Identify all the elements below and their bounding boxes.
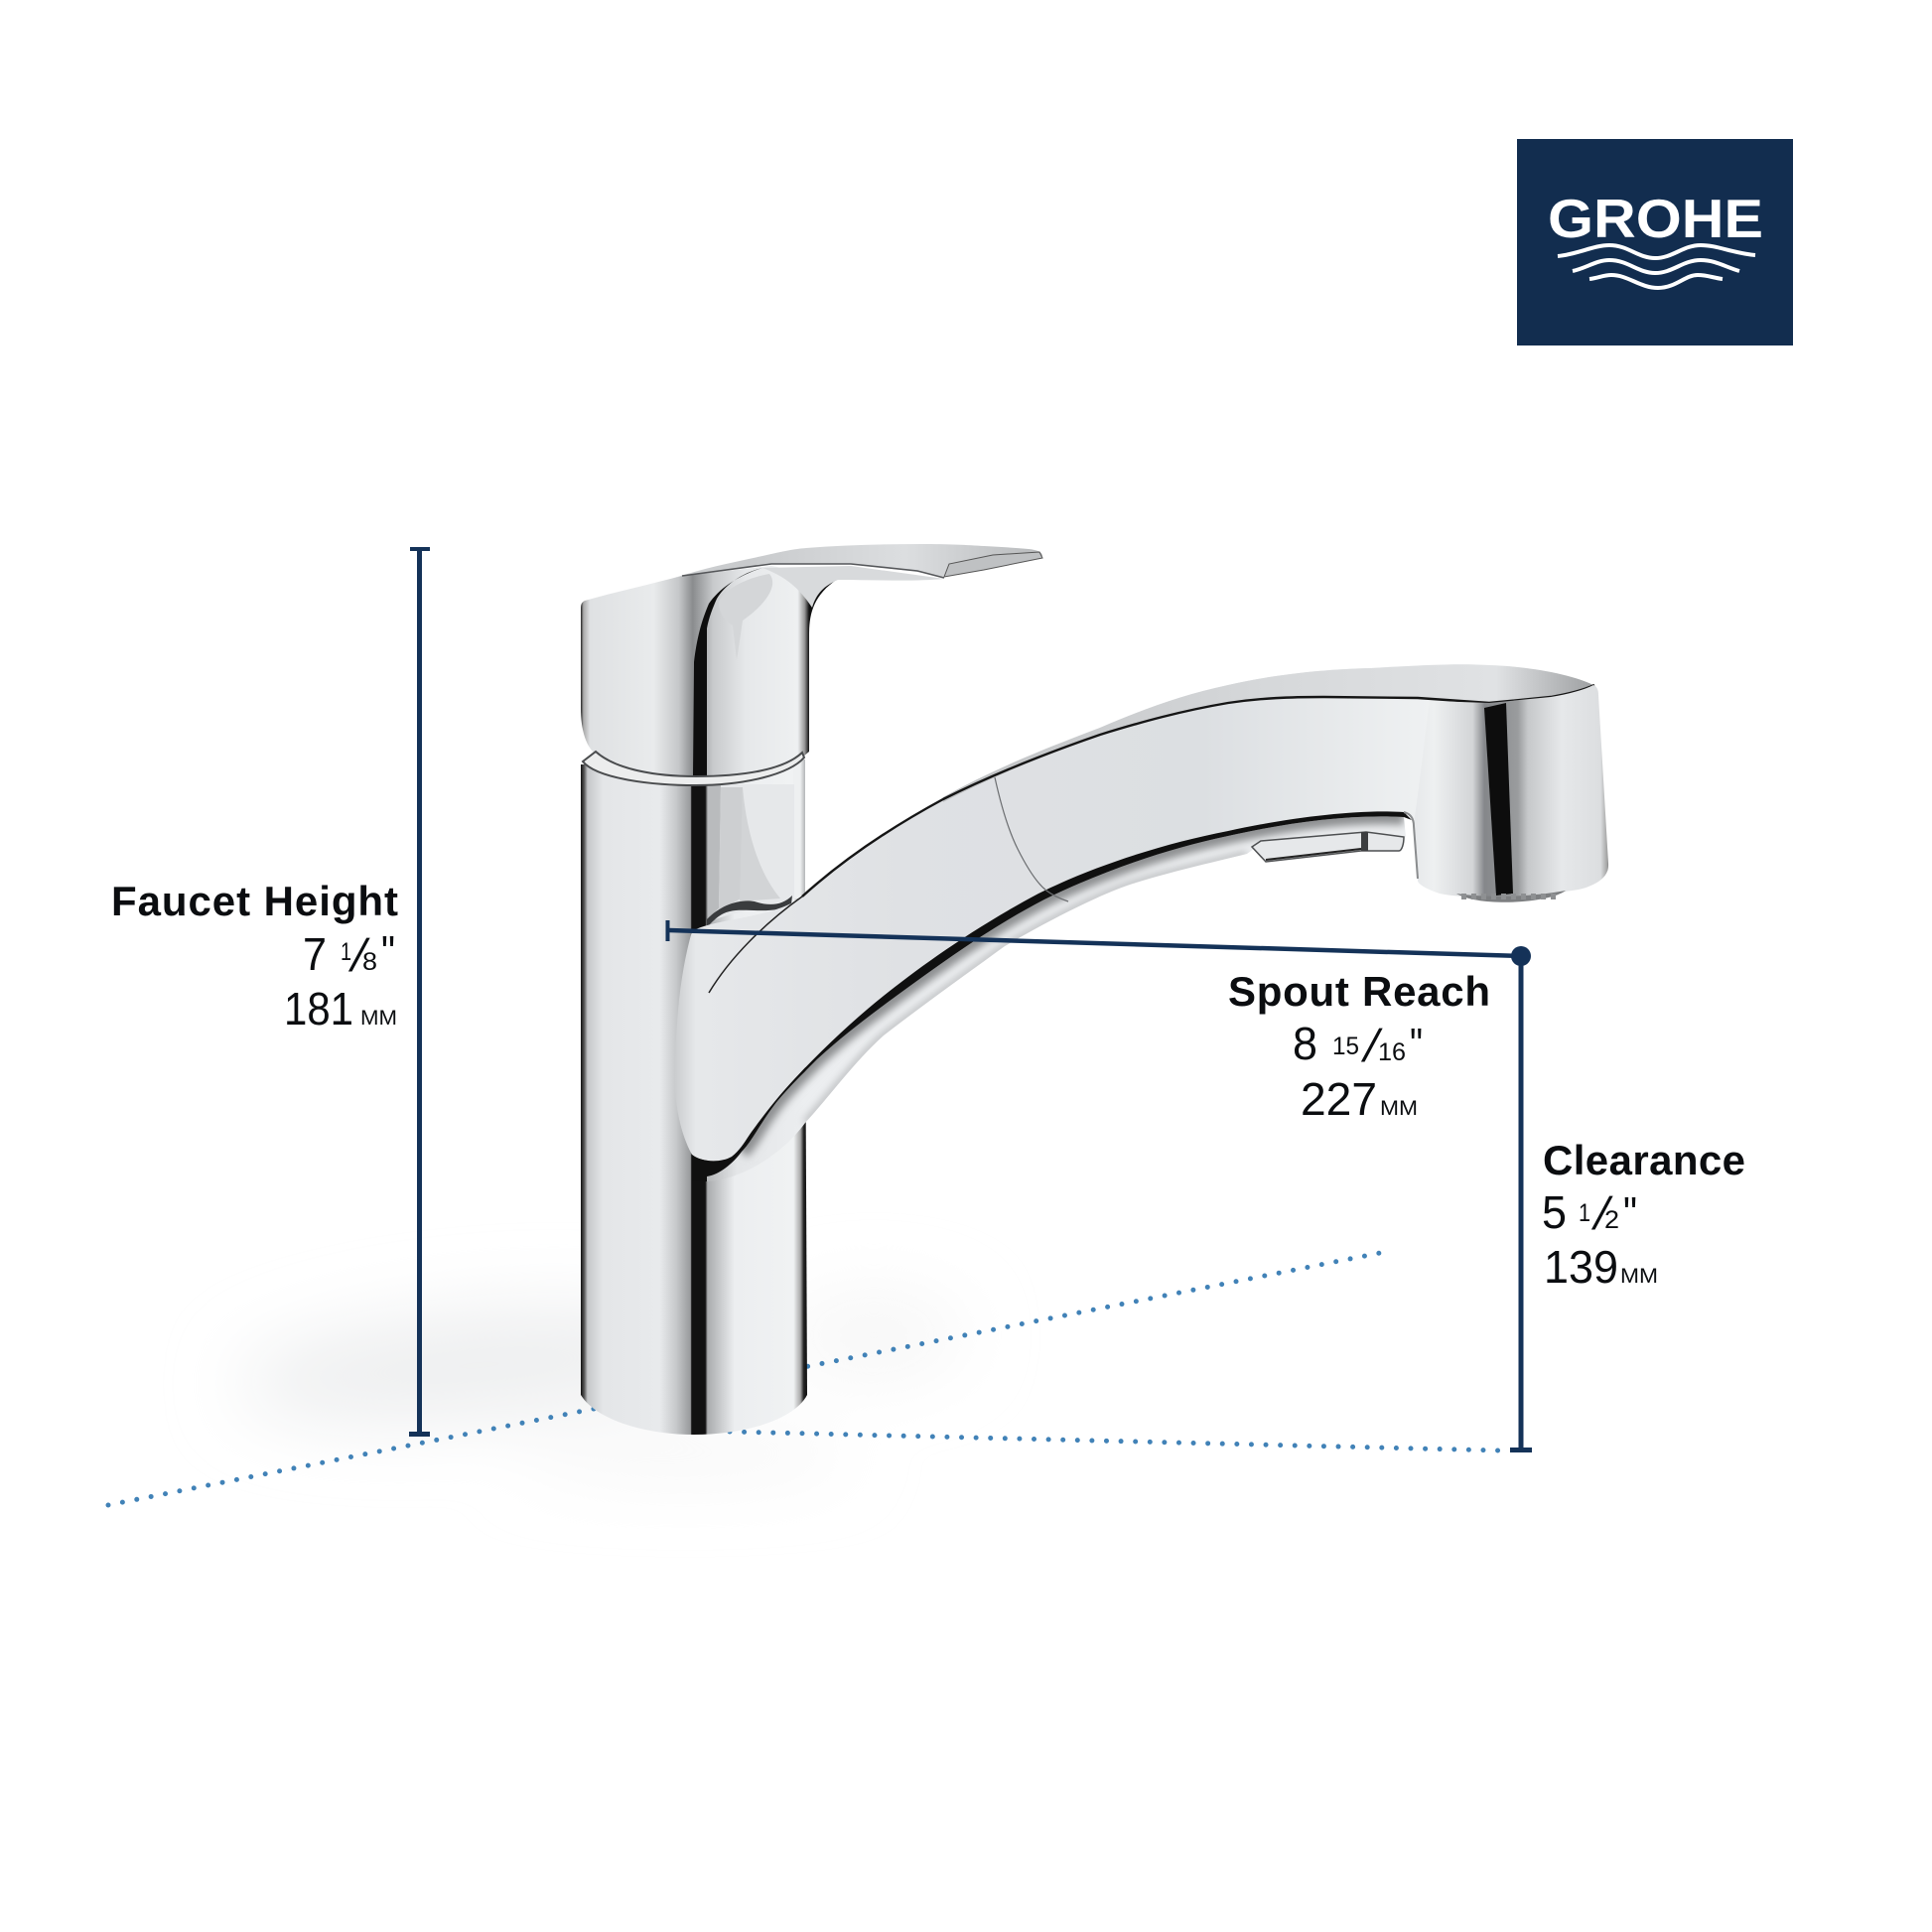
label: clearance bbox=[1542, 1137, 1745, 1293]
lever underside bbox=[762, 566, 944, 608]
spout body bbox=[675, 664, 1608, 1161]
GROHE logo: GROHE bbox=[1548, 188, 1763, 249]
label: spout reach: / bbox=[1358, 1021, 1385, 1071]
label: faucet height: / bbox=[345, 930, 372, 981]
column upper right rim bbox=[800, 759, 808, 898]
lever tip bbox=[944, 552, 1042, 577]
dimension line: spout reach bbox=[665, 920, 1531, 966]
aerator bbox=[1456, 891, 1566, 902]
spout underside band bbox=[707, 816, 1406, 1181]
head black stripe bbox=[1484, 703, 1513, 896]
spray head bbox=[1414, 685, 1608, 897]
label: spout reach bbox=[1228, 968, 1490, 1125]
label: clearance: / bbox=[1588, 1188, 1615, 1239]
head inner edge bbox=[1404, 812, 1418, 879]
GROHE logo bbox=[1517, 139, 1793, 345]
logo waves bbox=[1558, 245, 1755, 288]
handle inner highlight bbox=[719, 574, 772, 660]
spout left seam bbox=[709, 897, 802, 993]
label: clearance: 1 bbox=[1579, 1199, 1590, 1227]
label: clearance: 5 bbox=[1542, 1186, 1567, 1238]
aerator nozzles bbox=[1461, 894, 1559, 899]
spout top surface bbox=[943, 664, 1593, 802]
label: spout reach: 15 bbox=[1332, 1033, 1359, 1060]
label: faucet height: 1 bbox=[341, 938, 351, 966]
spout black reflection bbox=[692, 811, 1412, 1181]
handle stripe bbox=[693, 568, 762, 776]
label: clearance: " bbox=[1623, 1187, 1637, 1239]
label: spout reach: 227 bbox=[1301, 1073, 1377, 1125]
dotted floor lines bbox=[108, 1253, 1498, 1505]
label: faucet height: MM bbox=[360, 1007, 397, 1030]
label: clearance: MM bbox=[1620, 1265, 1658, 1288]
dimension line: faucet height bbox=[409, 547, 430, 1437]
label: spout reach: 8 bbox=[1293, 1018, 1317, 1069]
column bbox=[581, 764, 807, 1435]
label: faucet height: 7 bbox=[303, 928, 327, 980]
label: faucet height: " bbox=[381, 926, 395, 978]
label: faucet height: 8 bbox=[362, 948, 377, 976]
handle body bbox=[581, 566, 838, 776]
lever crease bbox=[682, 564, 944, 578]
label: clearance: 139 bbox=[1544, 1241, 1618, 1293]
label: spout reach: MM bbox=[1380, 1097, 1418, 1120]
spray trigger bbox=[1252, 832, 1404, 862]
dimension line: clearance bbox=[1510, 956, 1532, 1452]
spout crease line bbox=[802, 685, 1594, 897]
cast shadow on countertop bbox=[234, 1290, 963, 1472]
lever top surface bbox=[585, 544, 1042, 601]
label: spout reach: " bbox=[1410, 1019, 1423, 1070]
faucet bbox=[581, 544, 1608, 1435]
label: faucet height: 181 bbox=[284, 983, 353, 1035]
column upper right shading bbox=[794, 759, 805, 898]
collar bbox=[583, 752, 804, 785]
label: clearance: Clearance bbox=[1543, 1137, 1745, 1183]
label: faucet height: Faucet Height bbox=[111, 878, 398, 924]
label: spout reach: Spout Reach bbox=[1228, 968, 1490, 1015]
lever reflection on column bbox=[707, 784, 794, 927]
label: faucet height bbox=[111, 878, 398, 1035]
spout pull-out seam bbox=[995, 777, 1068, 901]
label: clearance: 2 bbox=[1604, 1206, 1619, 1234]
label: spout reach: 16 bbox=[1378, 1038, 1406, 1066]
